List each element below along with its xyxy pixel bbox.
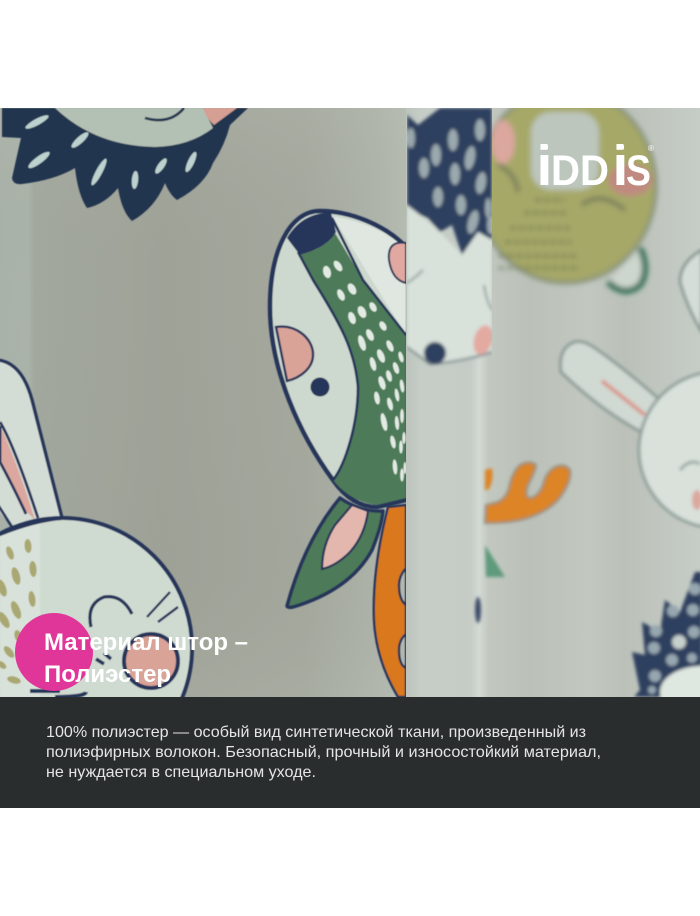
heading: material title <box>44 629 248 688</box>
panel: right curtain photo <box>406 89 700 718</box>
logo: IDDIS: ® <box>648 144 654 153</box>
text block: description: 100% полиэстер — особый вид синтетической ткани, произведенный из <box>46 724 586 741</box>
text block: description <box>46 724 601 781</box>
panel: left curtain photo <box>0 108 406 697</box>
logo: IDDIS: DD <box>551 147 609 195</box>
text block: description: не нуждается в специальном уходе. <box>46 764 316 781</box>
illustration: blurred bunny right <box>560 250 700 528</box>
illustration: carrot <box>374 505 406 697</box>
illustration: blurred hedgehog bottom right <box>630 570 700 697</box>
logo: IDDIS: i <box>536 134 552 198</box>
illustration: blurred olive bear <box>492 108 660 298</box>
heading: material title: Полиэстер <box>44 661 171 688</box>
illustration: hedgehog top left <box>2 108 248 221</box>
accent: pink circle <box>15 613 93 691</box>
logo: IDDIS: S <box>626 147 651 195</box>
panel: dark description band <box>0 697 700 808</box>
illustration: deer face <box>270 211 406 507</box>
illustration: deer lower ear <box>287 498 383 607</box>
logo: IDDIS: i <box>612 134 628 198</box>
illustration: blurred hedgehog on fold <box>407 108 496 365</box>
illustration: blurred green triangle and mark <box>475 545 505 623</box>
text block: description: полиэфирных волокон. Безопасный, прочный и износостойкий материал, <box>46 744 601 761</box>
illustration: blurred orange antler <box>485 462 570 523</box>
heading: material title: Материал штор – <box>44 629 248 656</box>
illustration: bunny left <box>0 358 195 697</box>
infographic canvas <box>0 108 700 808</box>
logo: IDDIS <box>540 144 654 186</box>
